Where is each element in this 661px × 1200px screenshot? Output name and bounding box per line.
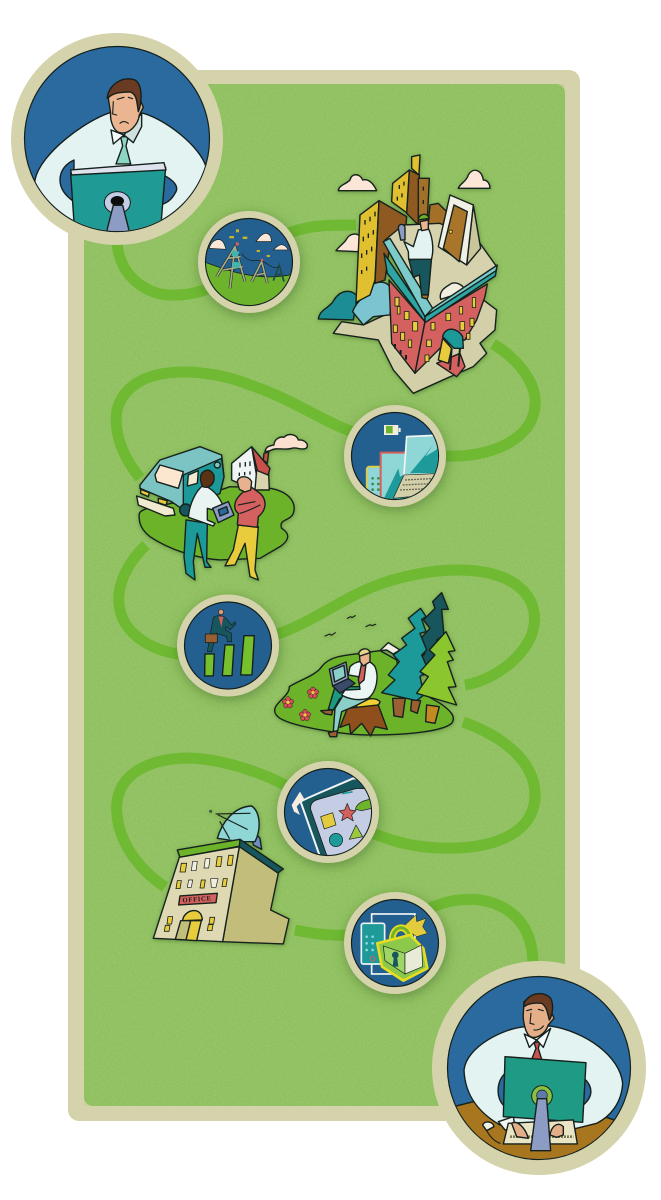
- illustration: man on tree stump with laptop in forest: [275, 593, 457, 737]
- laptop: [329, 662, 348, 686]
- medallion: devices with battery: [344, 405, 446, 507]
- arms: [60, 160, 74, 202]
- padlock body: [377, 935, 427, 981]
- tablet: [381, 453, 414, 503]
- cloud top right: [458, 170, 490, 188]
- bars: [205, 654, 214, 676]
- medallion: security padlock: [344, 892, 446, 994]
- illustration: van, house and two people: [137, 435, 307, 580]
- balustrades: [384, 253, 425, 322]
- monitor stand: [532, 1086, 552, 1106]
- flowers: [282, 687, 319, 721]
- desk: [456, 1101, 614, 1159]
- entrance: [437, 353, 465, 377]
- roof puff: [440, 283, 465, 299]
- lawn: [139, 487, 294, 560]
- phone: [367, 467, 387, 500]
- hands: [512, 1122, 528, 1138]
- tablet: [300, 777, 371, 855]
- shirt: [33, 113, 213, 237]
- tower windows: [362, 182, 423, 274]
- office sign: [179, 893, 217, 905]
- birds: [325, 616, 376, 636]
- house: [232, 447, 257, 490]
- medallion: transmission towers: [198, 211, 300, 313]
- lectern hole and pipe: [104, 192, 130, 214]
- chimney: [263, 452, 269, 463]
- arms: [498, 1073, 505, 1107]
- starburst: [292, 792, 304, 815]
- medallion: growth bars with climbing businessman: [177, 594, 279, 696]
- laptop: [404, 435, 443, 475]
- inspector: [409, 257, 432, 295]
- meadow: [275, 651, 453, 735]
- towers: [217, 247, 267, 288]
- icons: [321, 813, 336, 829]
- door on roof: [467, 205, 481, 265]
- outer frame: [68, 70, 580, 1121]
- building side: [223, 847, 289, 944]
- winding green path: [116, 225, 535, 965]
- clouds: [209, 233, 288, 250]
- upper windows: [176, 855, 233, 889]
- burst: [403, 915, 427, 937]
- character: worried man behind book: [11, 33, 223, 245]
- background towers: [412, 155, 420, 175]
- mouse: [483, 1122, 494, 1131]
- building front: [153, 847, 239, 942]
- smoke: [265, 435, 307, 452]
- face: [108, 89, 143, 133]
- medallion: tablet with shapes: [277, 761, 393, 870]
- shackle: [392, 928, 411, 943]
- face: [523, 998, 554, 1037]
- businessman: [207, 616, 236, 652]
- battery: [384, 425, 398, 435]
- roof deck: [385, 223, 497, 320]
- facial features: [113, 97, 133, 123]
- book: [71, 167, 166, 237]
- phone: [361, 923, 385, 964]
- illustration: office building with satellite dish: [153, 806, 289, 944]
- facial features: [527, 1009, 543, 1030]
- cuffs: [498, 1117, 515, 1130]
- stump: [357, 699, 380, 709]
- green panel: [84, 84, 565, 1106]
- collar and tie: [532, 1042, 542, 1059]
- back monitor: [372, 914, 415, 974]
- keyboard: [503, 1120, 577, 1144]
- hair: [107, 79, 141, 112]
- cloud left: [336, 234, 360, 252]
- distant mountain: [380, 643, 400, 654]
- van: [140, 447, 224, 510]
- teal roof rails: [383, 238, 433, 317]
- teal tree: [382, 608, 428, 701]
- shirt: [464, 1026, 623, 1130]
- red walls: [389, 280, 425, 373]
- doorway: [183, 911, 202, 921]
- man with laptop: [328, 687, 360, 710]
- dark tree: [418, 593, 448, 675]
- light tree: [417, 632, 457, 705]
- windows: [393, 297, 476, 362]
- man with crossed arms: [225, 525, 258, 580]
- woman with tablet: [184, 520, 211, 580]
- satellite dish: [209, 806, 262, 849]
- sign text: OFFICE: [182, 895, 212, 904]
- hair: [524, 994, 553, 1020]
- illustration: city building with inspector: [318, 155, 497, 393]
- hill: [206, 262, 290, 305]
- bushes: [318, 291, 357, 320]
- island base: [333, 300, 497, 393]
- cloud top left: [338, 175, 377, 191]
- collar and tie: [116, 137, 131, 164]
- monitor: [503, 1057, 586, 1122]
- character: happy man at computer: [432, 961, 646, 1177]
- roof: [177, 839, 241, 857]
